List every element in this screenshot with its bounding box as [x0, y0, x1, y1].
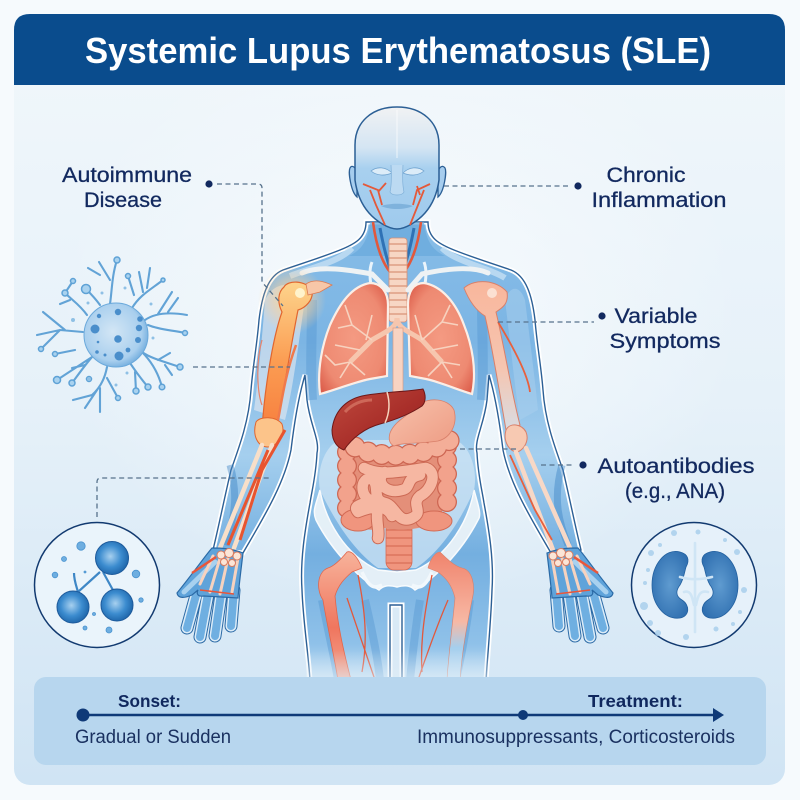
pelvis [314, 440, 480, 590]
label: autoimmune disease: Disease [84, 189, 162, 212]
onset label: Sonset: [118, 691, 181, 711]
left lung [319, 283, 388, 394]
bronchi [325, 305, 460, 378]
rectum [386, 522, 412, 570]
label: autoantibodies: Autoantibodies [598, 455, 754, 478]
left hand [177, 548, 243, 637]
label: variable symptoms: Symptoms [610, 330, 720, 353]
label: autoantibodies: (e.g., ANA) [625, 480, 725, 503]
aorta [393, 328, 403, 394]
face features [363, 165, 430, 225]
large intestine [341, 440, 452, 531]
connector: chronic inflammation [444, 185, 571, 187]
left arm bones [220, 281, 332, 548]
connector: antibodies circle [97, 478, 270, 517]
trachea [370, 238, 426, 322]
label: autoimmune disease: Autoimmune [62, 164, 192, 187]
icon: antibodies circle [34, 522, 160, 648]
right hand [547, 548, 613, 637]
onset detail: Gradual or Sudden [75, 727, 231, 748]
label: variable symptoms [598, 305, 720, 353]
leg fade [306, 650, 488, 680]
connector: autoantibodies [460, 449, 575, 465]
label: chronic inflammation: Chronic [606, 164, 686, 187]
small intestine [356, 468, 433, 538]
icon: immune cell [37, 257, 188, 412]
lungs [319, 283, 474, 394]
treatment label: Treatment: [588, 691, 683, 711]
body silhouette [213, 222, 581, 680]
label: chronic inflammation [574, 164, 726, 212]
cell body [84, 303, 148, 367]
icon: kidneys circle [632, 522, 756, 648]
connector: autoimmune disease [217, 184, 283, 306]
femurs [319, 552, 474, 680]
connector: immune cell [193, 366, 290, 368]
anatomical body figure [177, 107, 613, 680]
stomach [389, 400, 455, 446]
label: autoantibodies [579, 455, 754, 503]
glow: inflamed shoulder [258, 266, 326, 334]
panel: onset and treatment timeline [34, 677, 766, 765]
treatment detail: Immunosuppressants, Corticosteroids [417, 727, 735, 748]
title bar [14, 14, 785, 85]
head [349, 107, 446, 229]
label: chronic inflammation: Inflammation [592, 189, 726, 212]
label: variable symptoms: Variable [614, 305, 698, 328]
liver [332, 389, 425, 450]
neck [349, 222, 445, 275]
timeline arrow [76, 708, 724, 722]
right lung [408, 283, 474, 394]
title: Systemic Lupus Erythematosus (SLE) [85, 30, 711, 71]
right arm bones [464, 282, 570, 550]
label: autoimmune disease [62, 164, 213, 212]
connector: variable symptoms [498, 321, 594, 323]
clavicles [302, 269, 488, 290]
